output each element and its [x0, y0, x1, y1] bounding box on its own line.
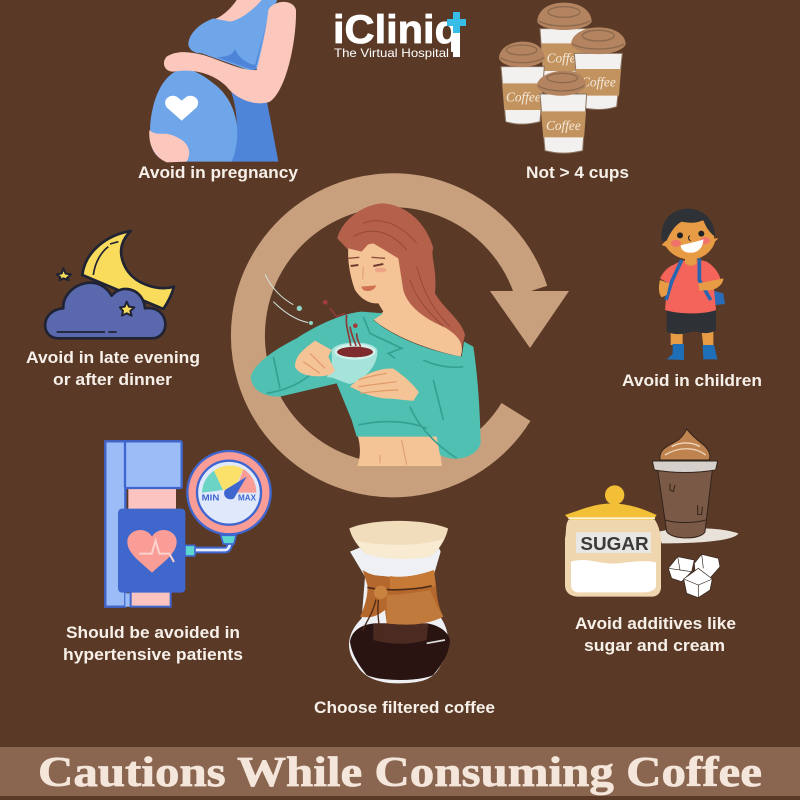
- icon: pregnant woman: [149, 0, 296, 162]
- icon: circular arrow: [248, 190, 569, 480]
- icon: moon and cloud: [45, 231, 174, 338]
- back cup: [537, 3, 592, 76]
- left cup: [499, 42, 545, 124]
- skin neck and shoulder: [348, 243, 462, 357]
- label: hypertensive: hypertensive patients: [63, 646, 243, 664]
- iced coffee: [658, 470, 712, 538]
- fringe: [337, 211, 427, 257]
- label: late evening: [26, 349, 200, 389]
- label: additives: sugar and cream: [584, 637, 725, 655]
- icon: four coffee cups: [499, 3, 626, 153]
- icon: filter coffee carafe: [349, 521, 450, 683]
- icon: child with backpack: [659, 209, 725, 360]
- right cup: Coffee: [581, 75, 616, 90]
- logo: The Virtual Hospital: [334, 46, 449, 60]
- label: hypertensive: Should be avoided in: [66, 624, 240, 642]
- hair: [337, 203, 465, 348]
- icon: blood pressure monitor: MIN: [202, 493, 219, 503]
- steam: [330, 308, 361, 347]
- hands: [295, 341, 335, 376]
- icon: sugar jar, iced coffee and sugar cubes: [565, 429, 738, 598]
- icon: blood pressure monitor: [105, 441, 271, 607]
- sugar cubes: [668, 557, 694, 582]
- midriff: [357, 432, 442, 466]
- logo: iCliniq: [333, 8, 460, 52]
- face details: [348, 257, 385, 258]
- sugar jar: [565, 520, 661, 597]
- label: cups: Not > 4 cups: [526, 164, 629, 182]
- label: late evening: Avoid in late evening: [26, 349, 200, 367]
- label: pregnancy: Avoid in pregnancy: [138, 164, 299, 182]
- icon: blood pressure monitor: MAX: [238, 493, 256, 503]
- front cup: Coffee: [546, 118, 581, 133]
- sweater: [251, 312, 481, 459]
- left cup: Coffee: [506, 90, 541, 105]
- motion lines: [265, 274, 308, 323]
- cup: [327, 342, 377, 384]
- label: additives: Avoid additives like: [575, 615, 736, 633]
- title banner: Cautions While Consuming Coffee: [38, 750, 762, 796]
- label: hypertensive: [63, 624, 243, 664]
- icon: sugar jar, iced coffee and sugar cubes: SUGAR: [580, 533, 649, 554]
- illustration: woman holding coffee cup: [251, 203, 481, 466]
- front cup: [537, 71, 587, 153]
- back cup: Coffee: [547, 51, 581, 66]
- right cup: [571, 27, 626, 109]
- iced coffee shadow: [658, 528, 738, 543]
- label: late evening: or after dinner: [53, 371, 173, 389]
- label: additives: [575, 615, 736, 655]
- label: children: Avoid in children: [622, 372, 762, 390]
- label: filtered coffee: Choose filtered coffee: [314, 699, 495, 717]
